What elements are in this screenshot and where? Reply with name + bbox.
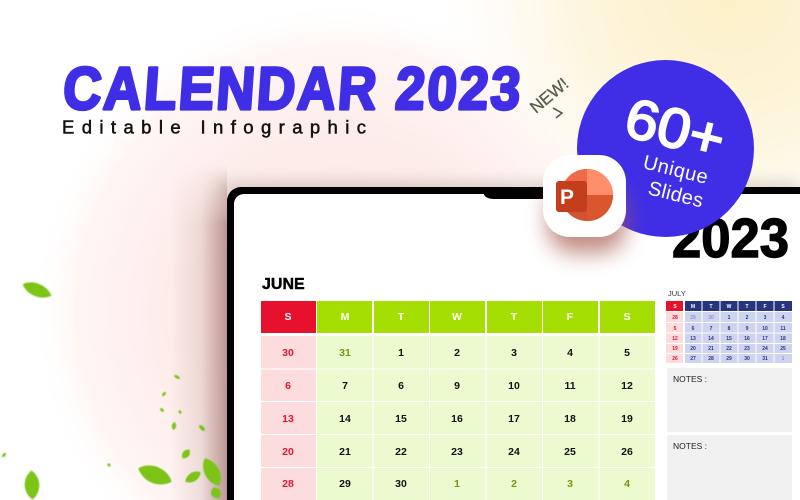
july weekday header: S	[781, 304, 785, 310]
badge: 60+ unique slides: Slides	[646, 178, 705, 212]
june weekday header: S	[284, 311, 292, 323]
july date cells: 30	[708, 315, 714, 321]
june date cells: 6	[285, 380, 291, 392]
july date cells: 11	[780, 326, 786, 332]
june date cells: 19	[621, 413, 633, 425]
july date cells: 19	[672, 346, 678, 352]
june date cells: 23	[451, 446, 463, 458]
july date cells: 6	[692, 326, 695, 332]
month label: july: JULY	[668, 289, 686, 298]
july date cells: 14	[708, 336, 714, 342]
july date cells: 17	[762, 336, 768, 342]
icon: powerpoint	[543, 155, 626, 253]
subtitle: Editable Infographic	[62, 116, 366, 138]
july weekday header: M	[691, 304, 695, 310]
june weekday header: W	[452, 311, 462, 323]
june date cells: 2	[454, 347, 460, 359]
july date cells: 1	[782, 356, 785, 362]
june date cells: 29	[339, 478, 351, 490]
july date cells: 3	[764, 315, 767, 321]
june date cells: 4	[567, 347, 573, 359]
july date cells: 4	[782, 315, 785, 321]
july date cells: 18	[780, 336, 786, 342]
july date cells: 25	[780, 346, 786, 352]
june date cells: 28	[282, 478, 294, 490]
month label: june: JUNE	[262, 276, 305, 293]
june weekday header	[261, 301, 655, 333]
july date cells: 13	[690, 336, 696, 342]
july date cells: 22	[726, 346, 732, 352]
badge: 60+ unique slides: Unique	[641, 152, 710, 189]
june weekday header: T	[398, 311, 405, 323]
july date cells: 9	[746, 326, 749, 332]
june date cells: 1	[454, 478, 460, 490]
june date cells: 15	[395, 413, 407, 425]
icon: powerpoint: P	[560, 186, 574, 209]
july date cells: 23	[744, 346, 750, 352]
july date cells: 12	[672, 336, 678, 342]
notes panel 2: NOTES :	[673, 441, 707, 451]
june date cells: 14	[339, 413, 351, 425]
july date cells: 10	[762, 326, 768, 332]
june date cells: 13	[282, 413, 294, 425]
june date cells	[261, 336, 655, 500]
july date cells: 29	[726, 356, 732, 362]
july date cells: 29	[690, 315, 696, 321]
june date cells: 26	[621, 446, 633, 458]
july date cells: 27	[690, 356, 696, 362]
july date cells: 5	[674, 326, 677, 332]
june date cells: 5	[624, 347, 630, 359]
july weekday header	[666, 301, 792, 311]
july date cells: 28	[672, 315, 678, 321]
june date cells: 2	[511, 478, 517, 490]
june date cells: 10	[508, 380, 520, 392]
june date cells: 30	[282, 347, 294, 359]
june date cells: 6	[398, 380, 404, 392]
june weekday header: S	[623, 311, 631, 323]
june date cells: 4	[624, 478, 630, 490]
june date cells: 30	[395, 478, 407, 490]
july date cells: 24	[762, 346, 768, 352]
july weekday header: T	[709, 304, 713, 310]
falling leaves	[1, 278, 226, 500]
july date cells	[666, 312, 792, 363]
july date cells: 26	[672, 356, 678, 362]
july date cells: 16	[744, 336, 750, 342]
june weekday header: F	[567, 311, 574, 323]
july weekday header: W	[727, 304, 732, 310]
june date cells: 11	[564, 380, 576, 392]
notes panel 1	[667, 368, 792, 432]
june date cells: 9	[454, 380, 460, 392]
june date cells: 1	[398, 347, 404, 359]
june date cells: 16	[451, 413, 463, 425]
july date cells: 21	[708, 346, 714, 352]
july date cells: 7	[710, 326, 713, 332]
june date cells: 12	[621, 380, 633, 392]
july date cells: 2	[746, 315, 749, 321]
laptop frame	[227, 187, 800, 500]
july date cells: 31	[762, 356, 768, 362]
handwritten note: new: NEW!	[526, 74, 572, 117]
notes panel 2	[667, 435, 792, 500]
june date cells: 20	[282, 446, 294, 458]
badge: 60+ unique slides: 60+	[619, 86, 731, 171]
june date cells: 17	[508, 413, 520, 425]
june weekday header: T	[511, 311, 518, 323]
june weekday header: M	[341, 311, 350, 323]
title: CALENDAR 2023	[61, 55, 523, 122]
year heading: 2023	[672, 207, 789, 269]
july weekday header: T	[745, 304, 749, 310]
badge: 60+ unique slides	[577, 60, 754, 237]
july date cells: 1	[728, 315, 731, 321]
notes panel 1: NOTES :	[673, 374, 707, 384]
june date cells: 3	[511, 347, 517, 359]
july mini calendar	[666, 301, 792, 363]
july weekday header: S	[673, 304, 677, 310]
june date cells: 7	[342, 380, 348, 392]
june date cells: 24	[508, 446, 520, 458]
july date cells: 28	[708, 356, 714, 362]
july date cells: 30	[744, 356, 750, 362]
july date cells: 8	[728, 326, 731, 332]
july date cells: 20	[690, 346, 696, 352]
june date cells: 25	[564, 446, 576, 458]
june date cells: 3	[567, 478, 573, 490]
june date cells: 31	[339, 347, 351, 359]
july date cells: 15	[726, 336, 732, 342]
june date cells: 18	[564, 413, 576, 425]
june date cells: 21	[339, 446, 351, 458]
june calendar	[261, 301, 655, 500]
july weekday header: F	[763, 304, 767, 310]
june date cells: 22	[395, 446, 407, 458]
